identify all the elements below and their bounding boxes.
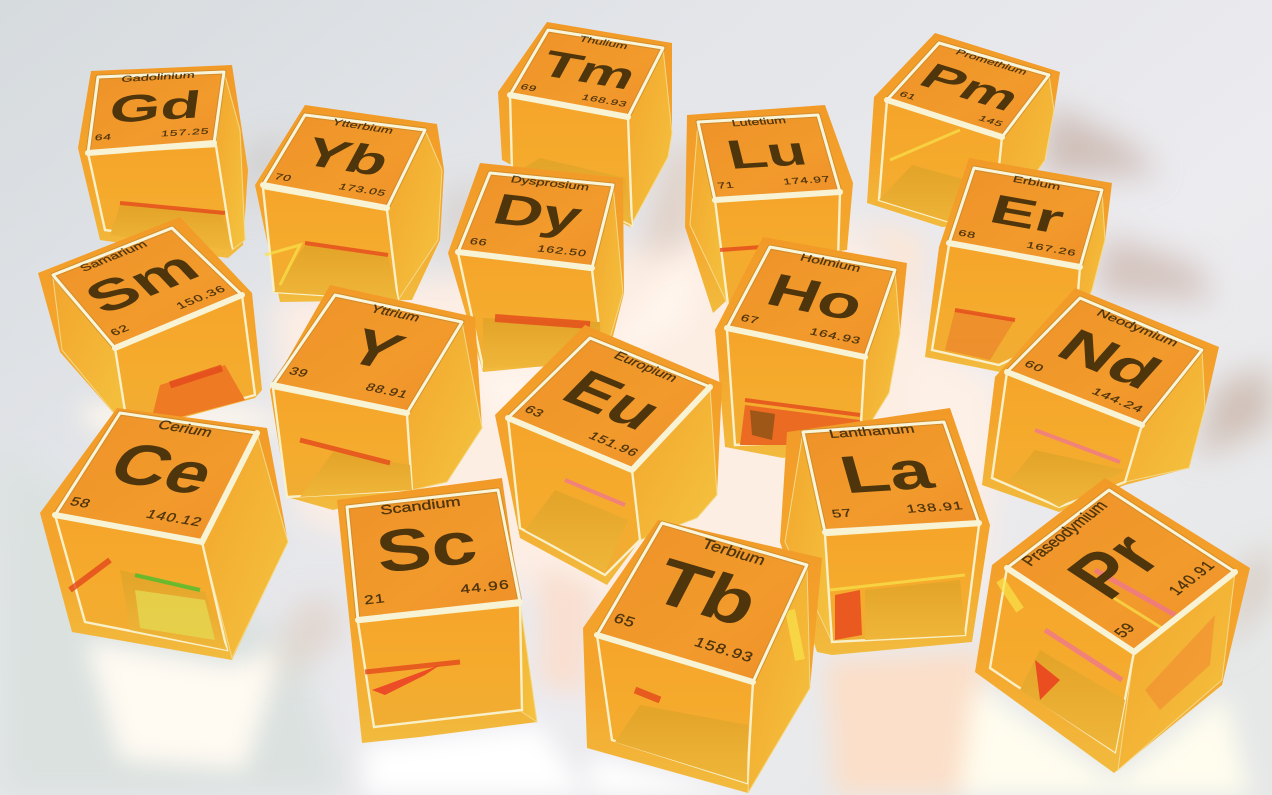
labels: Tm: Tm (533, 42, 645, 97)
cube: Dysprosium (448, 163, 624, 372)
cube: Neodymium (982, 288, 1219, 512)
cube: Europium (495, 325, 722, 585)
labels: Pm: Promethium (953, 48, 1029, 77)
cube: Scandium (337, 478, 537, 743)
labels: Dy (468, 172, 610, 259)
cube: Yttrium (270, 285, 482, 510)
labels: Pr: Praseodymium (1018, 498, 1112, 569)
labels: Tm: 168.93 (580, 93, 629, 109)
labels: Sm: Sm (72, 241, 211, 323)
labels: Gd: 157.25 (161, 127, 210, 139)
cube: Promethium (867, 33, 1060, 235)
labels: Dy: Dy (487, 185, 588, 242)
labels: Er: 167.26 (1025, 240, 1078, 258)
cube: Praseodymium (975, 478, 1250, 773)
labels: Yb: Yb (294, 129, 399, 185)
labels: La: La (834, 441, 941, 505)
cube: Cerium (40, 408, 288, 660)
labels: Yb: Ytterbium (330, 117, 396, 136)
labels: Sc: Scandium (379, 495, 461, 518)
cube: Erbium (925, 158, 1112, 372)
labels: Nd (1022, 299, 1200, 415)
labels: Tb (611, 523, 802, 666)
labels: Eu: Europium (610, 349, 681, 385)
cast shadows (245, 105, 1272, 680)
cube: Gadolinium (78, 65, 248, 258)
labels: Tm: Thulium (577, 35, 629, 51)
labels: Pr: Pr (1050, 520, 1179, 612)
labels: Pr (1010, 492, 1220, 641)
labels: Yb: 70 (273, 172, 294, 184)
labels: Lu: Lutetium (731, 115, 787, 129)
labels: Lu: 71 (717, 181, 735, 191)
labels: Lu (701, 113, 832, 191)
labels: Pm: 145 (976, 114, 1006, 129)
cube: Holmium (715, 237, 907, 458)
labels: Er: Erbium (1012, 174, 1062, 192)
labels: Pm (897, 43, 1045, 129)
labels: Lu: 174.97 (782, 175, 832, 187)
cube: Ytterbium (255, 105, 444, 302)
labels: Pr: 140.91 (1165, 558, 1220, 598)
labels: Sc: Sc (372, 509, 481, 586)
labels: Dy: 162.50 (536, 243, 589, 259)
labels: Yb (273, 113, 420, 198)
labels: Sc: 21 (363, 591, 386, 608)
cube: Lutetium (685, 105, 853, 313)
labels: Nd: Neodymium (1094, 307, 1182, 349)
labels: Eu (522, 339, 705, 459)
labels: Sc: 44.96 (460, 578, 511, 597)
labels: Eu: 151.96 (586, 430, 642, 459)
labels: Tb: Terbium (699, 535, 769, 569)
labels: Ho: Holmium (798, 251, 863, 274)
labels: Sm: Samarium (77, 238, 150, 274)
labels: Pm: Pm (911, 56, 1031, 118)
soft peach floor glow (0, 220, 1000, 795)
labels: Ce: Ce (98, 430, 227, 507)
labels: Ho (739, 245, 892, 346)
cube: Thulium (498, 22, 672, 227)
labels: Ho: 164.93 (808, 326, 863, 346)
labels: Sm (55, 228, 229, 338)
labels: Gd: Gd (107, 83, 204, 131)
labels: Gd: 64 (94, 133, 112, 143)
labels: Dy: 66 (468, 236, 489, 248)
labels: Y: Yttrium (368, 302, 423, 324)
labels: La: Lanthanum (828, 423, 916, 441)
labels: Tb: 158.93 (692, 635, 756, 666)
labels: La: 57 (830, 506, 854, 520)
labels: Ho: Ho (759, 264, 872, 331)
labels: Eu: Eu (549, 360, 677, 441)
labels: Sm: 150.36 (173, 283, 229, 311)
labels: Yb: 173.05 (337, 182, 388, 198)
labels: Sm: 62 (107, 322, 132, 338)
labels: La (808, 421, 965, 520)
labels: Tb: 65 (611, 611, 638, 631)
labels: La: 138.91 (905, 499, 965, 515)
labels: Lu: Lu (722, 128, 811, 178)
labels: Dy: Dysprosium (509, 174, 591, 193)
labels: Nd: 144.24 (1089, 386, 1147, 415)
labels: Y (287, 294, 457, 401)
labels: Y: 39 (287, 365, 311, 380)
labels: Er (957, 168, 1097, 258)
labels: Tm: 69 (519, 83, 539, 93)
cube: Lanthanum (780, 408, 990, 655)
labels: Er: Er (985, 186, 1070, 242)
labels: Ce (67, 411, 253, 530)
labels: Eu: 63 (522, 403, 548, 420)
labels: Pm: 61 (897, 90, 918, 102)
labels: Gd: Gadolinium (121, 70, 196, 84)
labels: Sc (351, 491, 511, 608)
labels: Pr: 59 (1111, 620, 1140, 641)
labels: Ce: 58 (67, 495, 93, 511)
cube: Terbium (583, 520, 822, 793)
labels: Tb: Tb (641, 545, 771, 640)
labels: Ce: 140.12 (143, 508, 205, 530)
reflections under cubes (80, 220, 1250, 795)
cube: Samarium (38, 217, 262, 432)
labels: Nd: 60 (1022, 358, 1047, 374)
labels: Ho: 67 (739, 312, 761, 326)
labels: Ce: Cerium (155, 418, 215, 440)
labels: Y: 88.91 (363, 381, 411, 401)
labels: Y: Y (335, 319, 414, 380)
labels: Nd: Nd (1046, 320, 1173, 399)
labels: Gd (94, 68, 218, 143)
labels: Tm (519, 30, 658, 109)
labels: Er: 68 (957, 228, 978, 240)
